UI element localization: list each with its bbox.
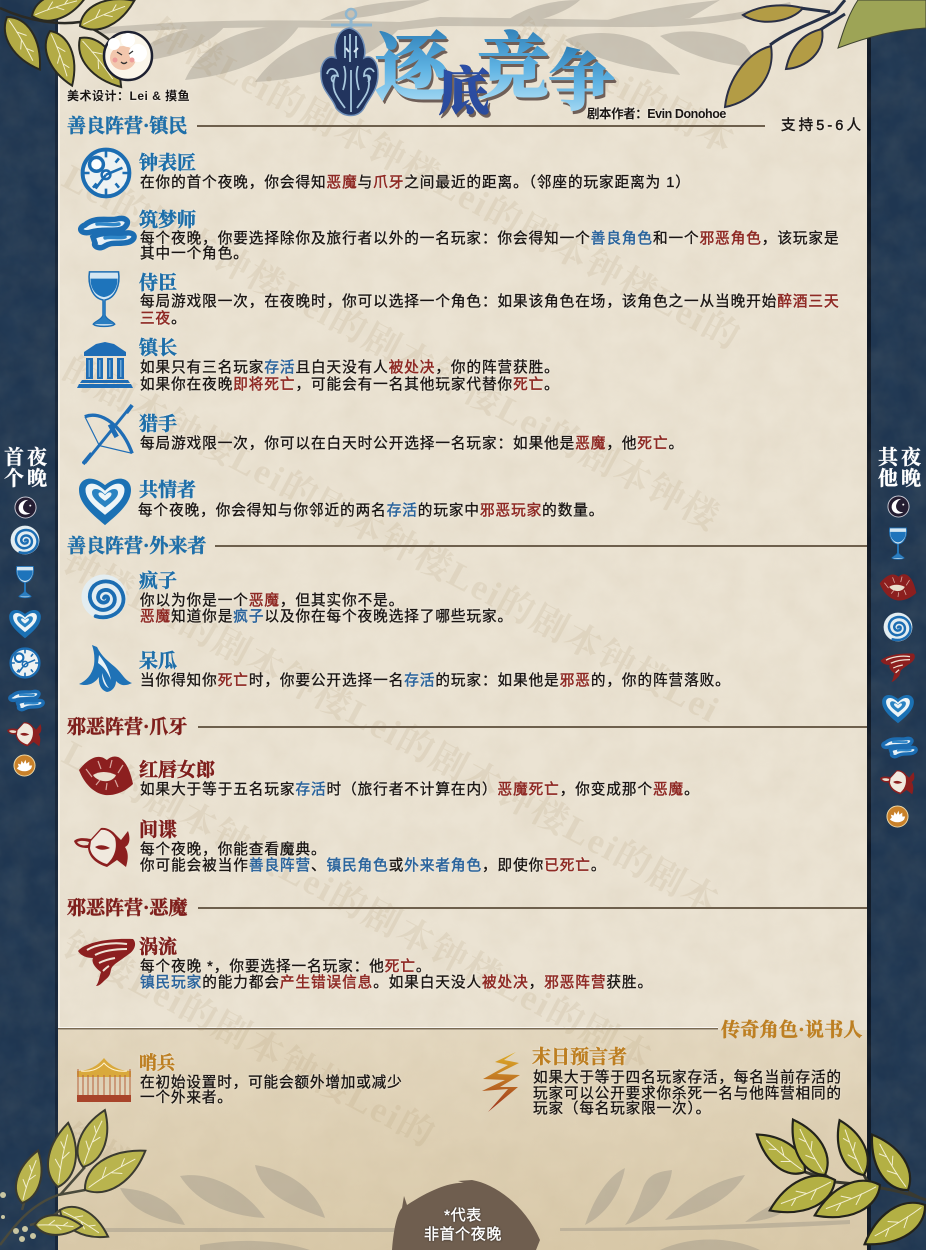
role: butler bbox=[79, 645, 731, 692]
section heading: minions: 邪恶阵营·爪牙 bbox=[67, 717, 187, 738]
role ability bbox=[533, 1071, 842, 1118]
footnote: 非首个夜晚 bbox=[424, 1226, 502, 1242]
role name: 间谍 bbox=[139, 820, 177, 841]
role: doomsayer bbox=[463, 1046, 853, 1118]
role ability: 当你得知你死亡时，你要公开选择一名存活的玩家：如果他是邪恶的，你的阵营落败。 bbox=[140, 673, 731, 689]
title text: 底 bbox=[438, 63, 490, 122]
role ability: 镇民玩家的能力都会产生错误信息。如果白天没人被处决，邪恶阵营获胜。 bbox=[140, 975, 653, 991]
other nights label: 其夜 bbox=[878, 447, 924, 469]
role ability: 你以为你是一个恶魔，但其实你不是。 bbox=[140, 593, 404, 609]
title text bbox=[375, 27, 614, 122]
role: dreamer bbox=[78, 209, 840, 262]
icon: lightning bbox=[480, 1052, 520, 1112]
title text: 竞 bbox=[477, 27, 549, 108]
icon: lips bbox=[79, 756, 133, 796]
first night label bbox=[4, 448, 50, 490]
icon: heart bbox=[882, 695, 914, 723]
role ability: 在初始设置时，可能会额外增加或减少 bbox=[140, 1075, 403, 1091]
watermark text: 钟楼Lei的剧本 bbox=[506, 12, 742, 163]
icon: lips bbox=[880, 574, 916, 600]
role name: 共情者 bbox=[139, 480, 196, 501]
role ability: 如果你在夜晚即将死亡，可能会有一名其他玩家代替你死亡。 bbox=[140, 377, 560, 393]
icon: goblet bbox=[16, 566, 34, 598]
icon: banana peel bbox=[79, 645, 132, 692]
icon: dream cloud bbox=[78, 216, 137, 250]
icon: heart bbox=[9, 610, 41, 638]
role ability: 玩家（每名玩家限一次）。 bbox=[533, 1101, 711, 1117]
role name: 涡流 bbox=[139, 937, 177, 958]
role ability: 在你的首个夜晚，你会得知恶魔与爪牙之间最近的距离。（邻座的玩家距离为 1） bbox=[140, 175, 691, 191]
other nights order icons bbox=[875, 490, 925, 830]
watermark text: 钟楼Lei的剧本钟楼Lei的剧本钟楼Lei的 bbox=[144, 12, 748, 358]
role: vortox bbox=[78, 936, 653, 991]
role name: 侍臣 bbox=[139, 273, 177, 294]
role ability: 如果大于等于四名玩家存活，每名当前存活的 bbox=[533, 1070, 842, 1086]
role ability: 如果只有三名玩家存活且白天没有人被处决，你的阵营获胜。 bbox=[140, 360, 560, 376]
section heading: demon: 邪恶阵营·恶魔 bbox=[67, 898, 187, 919]
watermark text: 钟楼Lei的剧本钟楼Lei的 bbox=[56, 925, 442, 1155]
watermark text: 钟楼 bbox=[56, 1117, 143, 1188]
icon: goblet bbox=[889, 528, 907, 559]
icon: sun bbox=[887, 806, 908, 827]
role ability: 恶魔知道你是疯子以及你在每个夜晚选择了哪些玩家。 bbox=[140, 609, 513, 625]
icon: spy bbox=[74, 828, 130, 867]
icon: heart bbox=[79, 478, 131, 526]
role ability: 每局游戏限一次，你可以在白天时公开选择一名玩家：如果他是恶魔，他死亡。 bbox=[140, 436, 684, 452]
other nights label bbox=[878, 448, 924, 490]
title text: 争 bbox=[548, 46, 614, 119]
watermark text: Lei的剧本钟楼Lei的剧本钟楼Lei的剧本钟楼 bbox=[56, 157, 728, 539]
section heading: townsfolk: 善良阵营·镇民 bbox=[67, 116, 187, 137]
role: lunatic bbox=[82, 570, 513, 625]
section heading: outsiders: 善良阵营·外来者 bbox=[67, 536, 206, 557]
role ability bbox=[140, 841, 606, 874]
icon: bow bbox=[82, 404, 134, 466]
credit: art design: 美术设计：Lei & 摸鱼 bbox=[67, 89, 190, 103]
role ability bbox=[140, 293, 840, 327]
icon: clock bbox=[11, 649, 39, 677]
role: clockmaker bbox=[80, 148, 691, 198]
icon: gate bbox=[76, 1057, 132, 1103]
icon: spiral bbox=[884, 613, 912, 641]
icon: vortex bbox=[881, 654, 915, 682]
first night label: 个晚 bbox=[4, 468, 50, 490]
role name: 猎手 bbox=[139, 414, 177, 435]
role: scarlet woman bbox=[79, 756, 700, 798]
role name: 呆瓜 bbox=[139, 651, 177, 672]
icon: moon bbox=[15, 497, 36, 518]
role name: 红唇女郎 bbox=[139, 760, 215, 781]
role: mayor bbox=[77, 337, 560, 393]
icon: spiral bbox=[82, 574, 126, 620]
role ability bbox=[140, 592, 513, 625]
icon: spy bbox=[880, 770, 914, 794]
first night label: 首夜 bbox=[4, 447, 50, 469]
role name: 疯子 bbox=[139, 571, 177, 592]
role: slayer bbox=[82, 404, 684, 466]
role ability bbox=[140, 1076, 403, 1106]
credit: script author: 剧本作者：Evin Donohoe bbox=[587, 107, 726, 121]
other nights label: 他晚 bbox=[878, 468, 924, 490]
section heading: fabled: 传奇角色·说书人 bbox=[721, 1020, 863, 1041]
watermark text: Lei的剧本钟楼Lei的剧本钟楼Lei的剧本 bbox=[56, 733, 660, 1079]
icon: cthulhu emblem bbox=[321, 9, 378, 116]
role ability: 每局游戏限一次，在夜晚时，你可以选择一个角色：如果该角色在场，该角色之一从当晚开始醉酒三天 bbox=[140, 294, 840, 310]
role: empath bbox=[79, 478, 604, 526]
role ability: 如果大于等于五名玩家存活时（旅行者不计算在内）恶魔死亡，你变成那个恶魔。 bbox=[140, 782, 700, 798]
role name: 镇长 bbox=[139, 338, 177, 359]
icon: temple bbox=[77, 342, 133, 388]
role ability: 其中一个角色。 bbox=[140, 246, 249, 262]
role name: 哨兵 bbox=[139, 1053, 175, 1073]
icon: spiral bbox=[11, 526, 39, 554]
role ability: 三夜。 bbox=[140, 311, 187, 327]
avatar: artist sheep bbox=[102, 30, 154, 82]
role: courtier bbox=[88, 271, 840, 328]
player count: 支持5-6人 bbox=[781, 118, 864, 134]
footnote bbox=[395, 1207, 531, 1244]
role ability: 一个外来者。 bbox=[140, 1090, 233, 1106]
role: sentinel bbox=[77, 1052, 403, 1106]
role ability bbox=[140, 958, 653, 991]
role ability: 玩家可以公开要求你杀死一名与他阵营相同的 bbox=[533, 1086, 842, 1102]
role ability bbox=[140, 230, 840, 262]
icon: clock bbox=[80, 148, 132, 198]
role ability: 每个夜晚，你要选择除你及旅行者以外的一名玩家：你会得知一个善良角色和一个邪恶角色，该玩家是 bbox=[140, 231, 840, 247]
icon: cloud bbox=[10, 691, 43, 710]
title text: 逐 bbox=[375, 28, 454, 110]
first night order icons bbox=[0, 490, 50, 785]
icon: vortex bbox=[78, 938, 136, 986]
title logo bbox=[320, 8, 616, 122]
role name: 筑梦师 bbox=[139, 210, 196, 231]
icon: cloud bbox=[883, 738, 916, 757]
role ability bbox=[140, 359, 560, 393]
role ability: 每个夜晚，你能查看魔典。 bbox=[140, 842, 327, 858]
watermark text: 的剧本钟楼Lei的剧本钟楼Lei的剧本钟楼Lei bbox=[56, 349, 727, 731]
icon: goblet bbox=[88, 271, 120, 328]
role ability: 你可能会被当作善良阵营、镇民角色或外来者角色，即使你已死亡。 bbox=[140, 858, 606, 874]
icon: spy bbox=[7, 722, 41, 746]
role name: 钟表匠 bbox=[139, 153, 196, 174]
icon: moon bbox=[888, 496, 909, 517]
footnote: *代表 bbox=[444, 1207, 482, 1224]
watermark text: 钟楼Lei的剧本钟楼Lei的剧本钟楼Lei的剧本 bbox=[56, 541, 727, 923]
role ability: 每个夜晚 *，你要选择一名玩家：他死亡。 bbox=[140, 959, 431, 975]
role name: 末日预言者 bbox=[532, 1047, 627, 1068]
icon: sun bbox=[14, 755, 35, 776]
role: spy bbox=[74, 819, 606, 874]
role ability: 每个夜晚，你会得知与你邻近的两名存活的玩家中邪恶玩家的数量。 bbox=[138, 503, 604, 519]
